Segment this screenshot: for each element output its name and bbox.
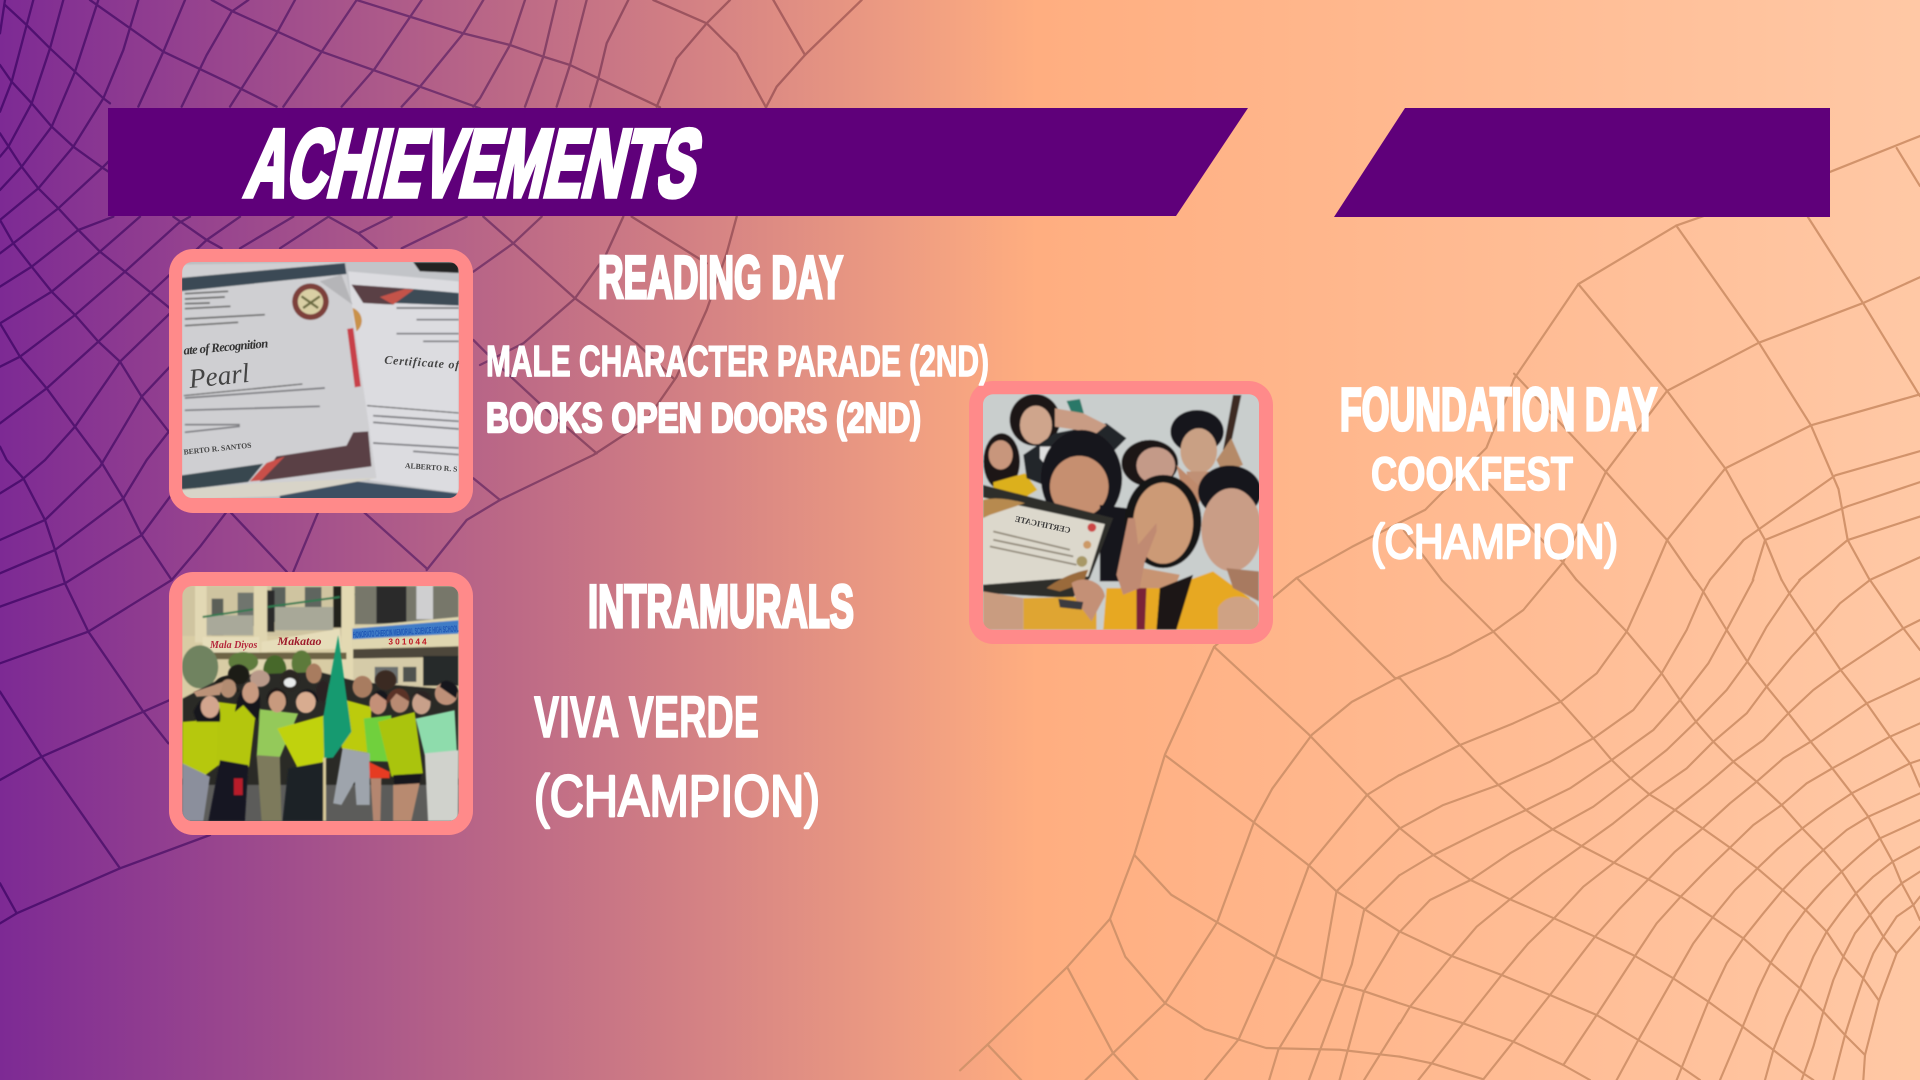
banner: left title bar: [108, 108, 1248, 216]
text: viva verde: VIVA VERDE: [534, 685, 759, 750]
faces & hair: [193, 698, 220, 722]
photo: certificates: [182, 262, 459, 498]
text: books open doors: BOOKS OPEN DOORS (2ND): [486, 394, 921, 441]
panel: foundation day photo: [969, 381, 1273, 644]
photo: certificates: Pearl: [186, 358, 251, 394]
text: male character parade: MALE CHARACTER PARADE (2ND): [486, 337, 989, 386]
photo: selfie with certificate: [983, 394, 1259, 630]
background mesh: left purple net: [0, 0, 862, 923]
legs: [182, 763, 210, 821]
photo: certificates: Certificate of: [384, 353, 461, 372]
heading: reading day: READING DAY: [598, 244, 843, 311]
photo: group with flag: [182, 586, 459, 821]
photo: selfie with certificate: CERTIFICATE: [1014, 514, 1071, 535]
shirts: [182, 718, 225, 777]
heading: foundation day: FOUNDATION DAY: [1340, 376, 1657, 443]
text: champion (intramurals): (CHAMPION): [534, 764, 820, 829]
photo: group with flag: 301044: [388, 637, 427, 647]
photo: certificates: ate of Recognition: [183, 336, 269, 358]
background mesh: right orange net, outer part: [960, 136, 1920, 1080]
heading: intramurals: INTRAMURALS: [588, 573, 854, 640]
title: ACHIEVEMENTS: [238, 111, 712, 217]
back row: [228, 665, 249, 685]
photo: group with flag: Mala Diyos: [209, 640, 257, 651]
panel: intramurals photo: [169, 572, 473, 835]
photo: certificates: ALBERTO R. S: [405, 461, 458, 474]
background mesh: right orange net, dense part: [1400, 580, 1920, 1080]
text: cookfest: COOKFEST: [1371, 447, 1573, 500]
banner: right bar: [1334, 108, 1830, 217]
photo: group with flag: Makatao: [277, 634, 321, 648]
text: champion (foundation day): (CHAMPION): [1371, 516, 1618, 569]
photo: certificates: BERTO R. SANTOS: [183, 441, 252, 457]
panel: reading day photo: [169, 249, 473, 513]
